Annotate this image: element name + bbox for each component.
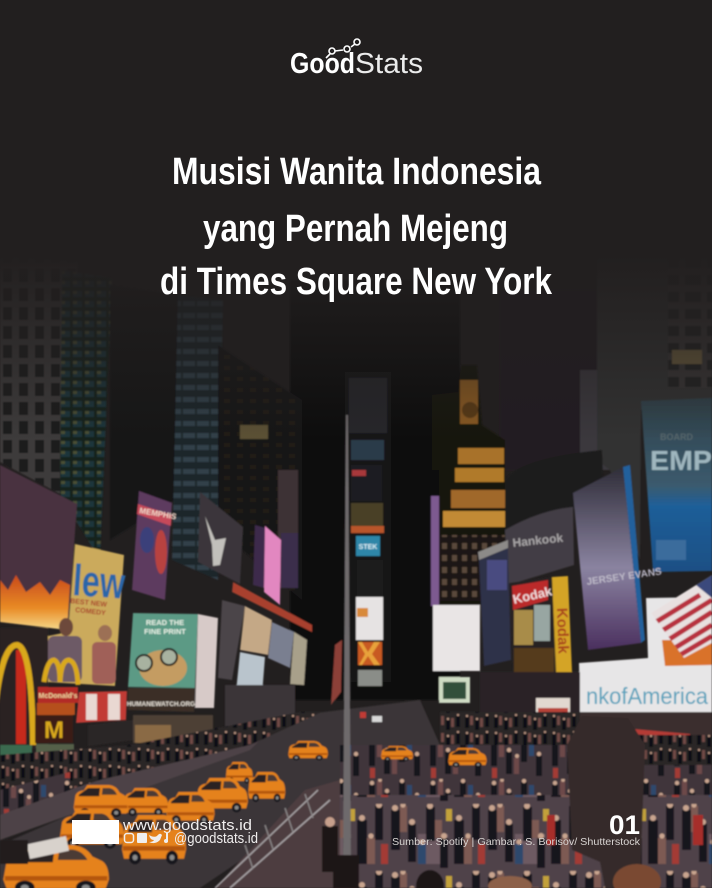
- statue billboard: [198, 492, 243, 584]
- stone monument: [567, 716, 645, 888]
- Read the Fine Print billboard: [127, 613, 218, 712]
- Jersey Evans billboard: [573, 465, 663, 650]
- Memphis billboard: [132, 491, 178, 600]
- title: Musisi Wanita Indonesia: [172, 151, 542, 193]
- McDonald's arches: M: [44, 717, 64, 744]
- road surface: [0, 700, 440, 888]
- logo wordmark: Stats: Stats: [355, 48, 423, 80]
- Board Empire billboard: EMP: [650, 445, 712, 476]
- Read the Fine Print billboard: HUMANEWATCH.ORG: [127, 701, 195, 708]
- signage strip over low building: [232, 582, 312, 632]
- barrier walkway: [215, 780, 340, 888]
- streetlight pole: [331, 415, 359, 888]
- Board Empire billboard: [641, 398, 712, 572]
- dark top fade over photo: [0, 0, 712, 440]
- Kodak billboard: Kodak: [553, 608, 572, 655]
- Board Empire billboard: BOARD: [660, 432, 693, 442]
- footer: social icons: [124, 833, 168, 843]
- New comedy billboard: COMEDY: [75, 607, 106, 617]
- low billboards along the street: [76, 600, 307, 746]
- logo chart line: [326, 39, 360, 58]
- logo wordmark: Good: Good: [290, 48, 355, 80]
- crowd: sidewalks and upper street: [0, 712, 712, 815]
- Memphis billboard: MEMPHIS: [139, 506, 178, 522]
- night sky gap: [290, 280, 460, 700]
- McDonald's arches: McDonald's: [38, 693, 78, 700]
- footer: handle: @goodstats.id: [174, 831, 258, 847]
- New comedy billboard: [46, 544, 127, 686]
- small green screen: [439, 677, 470, 703]
- white screen: [433, 605, 480, 671]
- dark purple poster: [478, 540, 511, 666]
- footer: website: www.goodstats.id: [122, 817, 252, 834]
- New comedy billboard: BEST NEW: [70, 598, 108, 609]
- Read the Fine Print billboard: FINE PRINT: [144, 627, 186, 636]
- Read the Fine Print billboard: READ THE: [146, 618, 184, 627]
- McDonald's arches: [0, 628, 78, 777]
- page number: 01: [609, 810, 640, 840]
- photo: Times Square at night: [0, 255, 712, 888]
- Bank of America screen: nkofAmerica: [586, 683, 708, 709]
- title: di Times Square New York: [160, 261, 553, 303]
- center tower with screens: [345, 372, 391, 686]
- source credit: Sumber: Spotify | Gambar : S. Borisov/ Shutterstock: [392, 836, 641, 848]
- crowd: plaza: [340, 712, 712, 888]
- Kodak billboard: Kodak: [511, 583, 554, 607]
- Kodak billboard: [509, 576, 573, 696]
- footer: white label box: [72, 820, 119, 844]
- title: [160, 151, 553, 303]
- Hankook cylinder: Hankook: [512, 531, 564, 550]
- buildings: right: [500, 255, 712, 560]
- yellow cabs: [0, 741, 487, 888]
- American flag: [651, 575, 712, 658]
- clock tower lit orange: [431, 365, 505, 606]
- logo: GoodStats: [290, 39, 423, 80]
- pink billboard: [253, 525, 298, 605]
- buildings: left: [0, 255, 302, 600]
- Jersey Evans billboard: JERSEY EVANS: [586, 566, 663, 588]
- left billboard: fire: [0, 465, 77, 630]
- title: yang Pernah Mejeng: [203, 208, 508, 250]
- Bank of America screen: [579, 597, 712, 718]
- low facade and marquee: [480, 672, 712, 744]
- foreground people: [322, 815, 703, 888]
- center tower with screens: STEK: [359, 544, 377, 551]
- Hankook cylinder: [505, 450, 604, 585]
- New comedy billboard: lew: [71, 556, 127, 609]
